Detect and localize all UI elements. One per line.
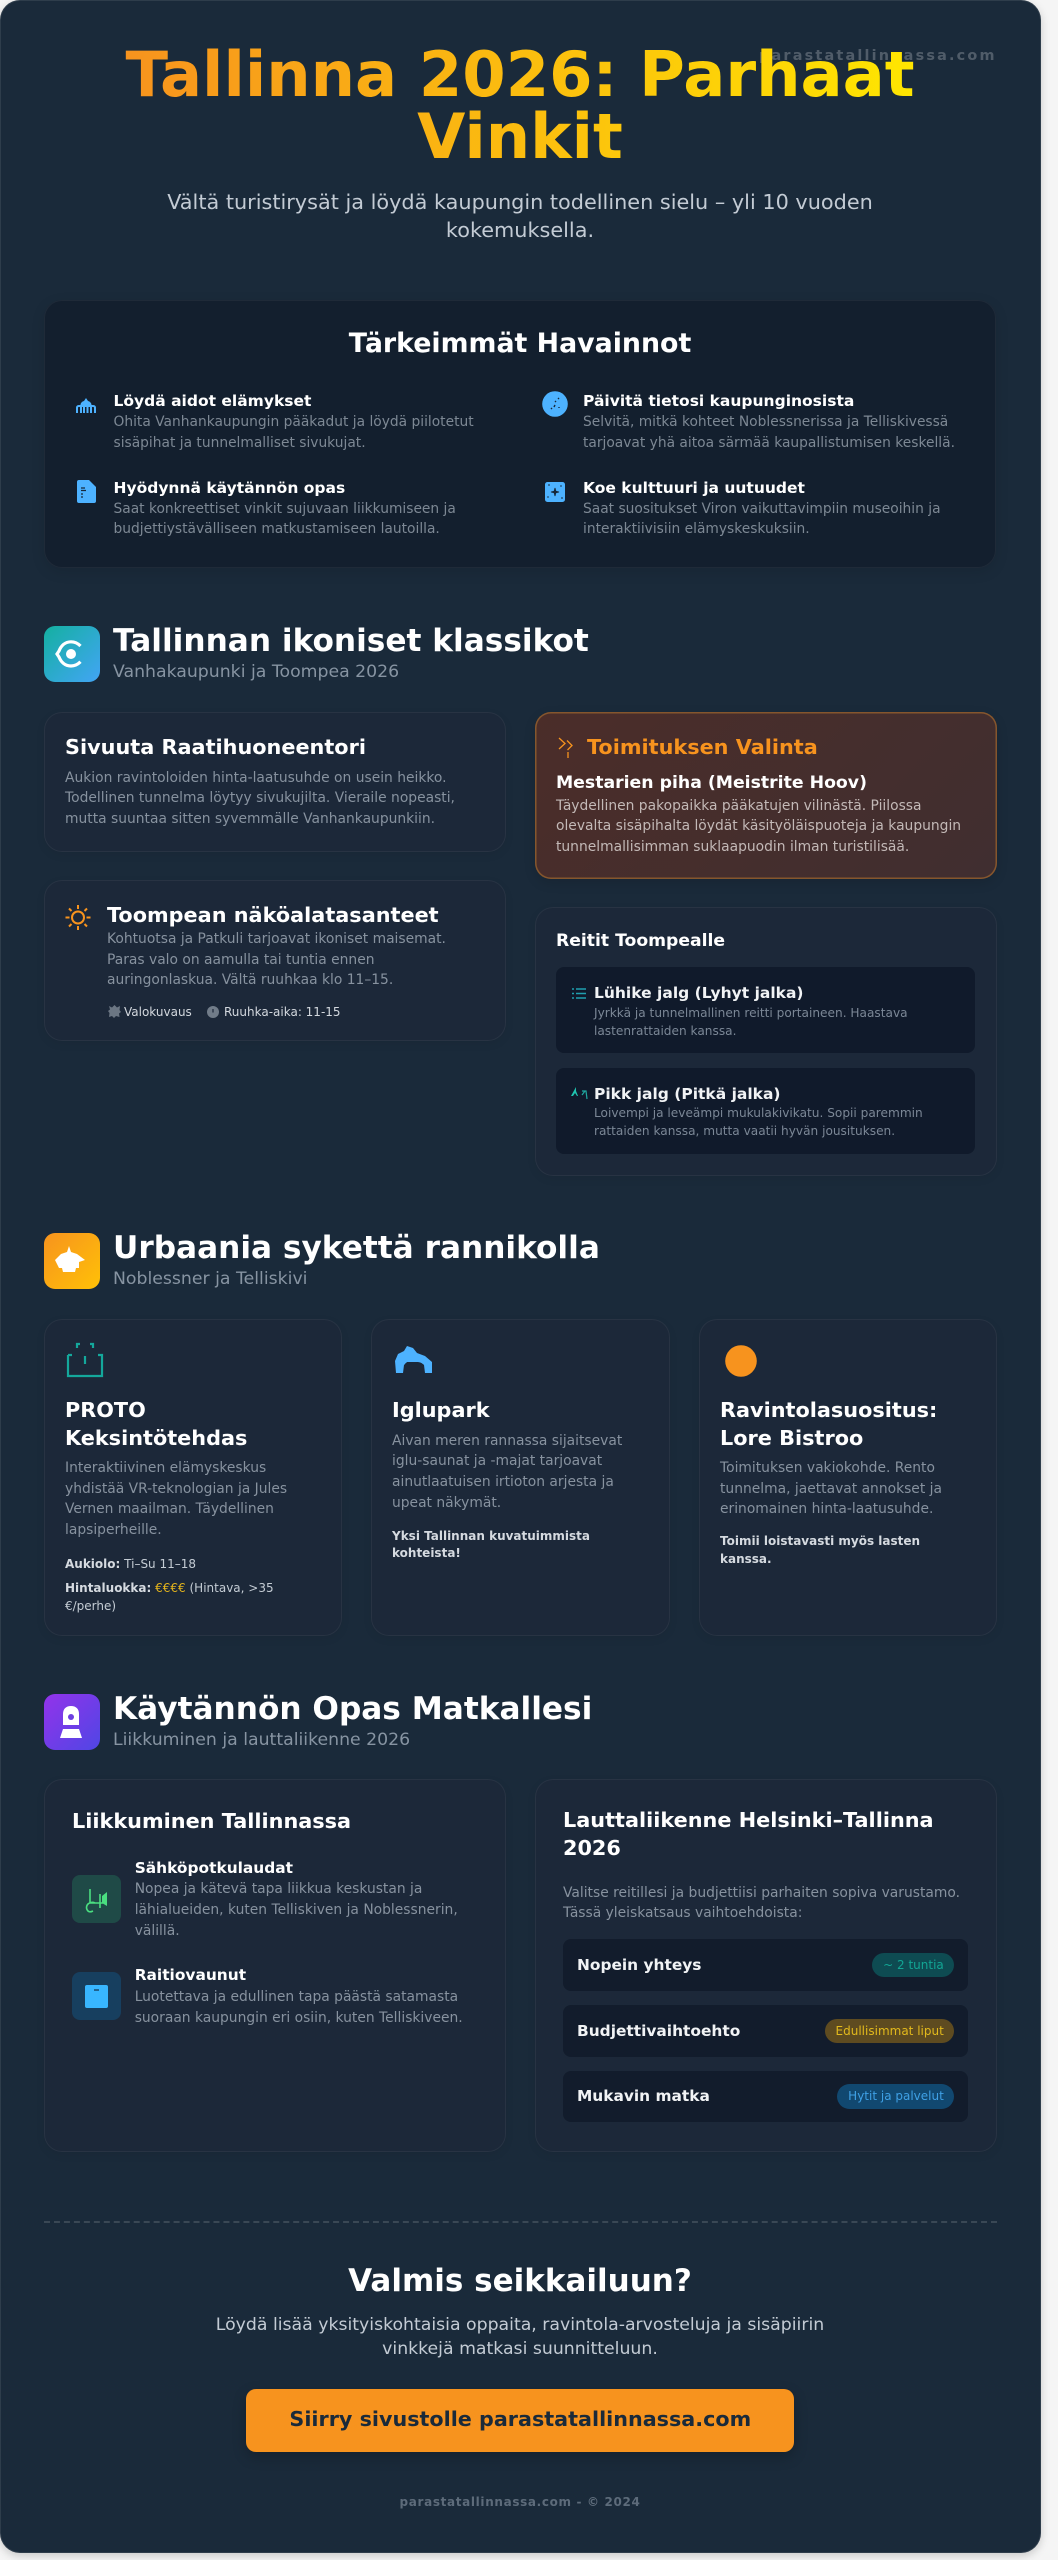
section header: urban pulse — [44, 1230, 600, 1289]
card note: kohteista! — [392, 1546, 461, 1560]
transport text — [135, 1879, 458, 1942]
panel text: Valitse reitillesi ja budjettiisi parhaiten sopiva varustamo. — [563, 1885, 960, 1901]
recommendation text: olevalta sisäpihalta löydät käsityöläispuoteja ja kaupungin — [556, 818, 961, 834]
footer: parastatallinnassa.com - © 2024 — [400, 2495, 640, 2509]
finding text — [114, 414, 474, 451]
transport: trams — [72, 1965, 492, 2035]
price range — [65, 1581, 274, 1613]
finding title: Löydä aidot elämykset — [114, 392, 311, 410]
icon: list — [572, 988, 586, 999]
card note: kanssa. — [720, 1552, 772, 1566]
recommended place name: Mestarien piha (Meistrite Hoov) — [556, 773, 867, 793]
finding: authentic experiences — [76, 392, 474, 451]
card text: Todellinen tunnelma löytyy sivukujilta. Vieraile nopeasti, — [65, 790, 455, 806]
card: PROTO — [44, 1319, 342, 1636]
title: Vinkit — [417, 100, 623, 173]
section subtitle: Vanhakaupunki ja Toompea 2026 — [113, 662, 399, 682]
transport text: välillä. — [135, 1923, 180, 1939]
transport text: Nopea ja kätevä tapa liikkua keskustan ja — [135, 1881, 422, 1897]
finding text: Selvitä, mitkä kohteet Noblessnerissa ja Telliskivessä — [583, 414, 948, 430]
badge: duration: ~ 2 tuntia — [883, 1958, 944, 1972]
panel title: Liikkuminen Tallinnassa — [72, 1809, 351, 1833]
tag label: Ruuhka-aika: 11-15 — [224, 1004, 341, 1018]
option label: Budjettivaihtoehto — [577, 2022, 740, 2040]
finding text: budjettiystävälliseen matkustamiseen lautoilla. — [114, 521, 440, 537]
finding text: interaktiivisiin elämyskeskuksiin. — [583, 521, 810, 537]
panel text: Tässä yleiskatsaus vaihtoehdoista: — [563, 1905, 802, 1921]
route text: rattaiden kanssa, mutta vaatii hyvän jousituksen. — [594, 1124, 895, 1138]
tag: photography — [108, 1004, 192, 1018]
ferry option: comfort — [563, 2071, 968, 2122]
transport: e-scooters — [72, 1858, 492, 1943]
transport text: Luotettava ja edullinen tapa päästä satamasta — [135, 1989, 458, 2005]
card text: Aukion ravintoloiden hinta-laatusuhde on usein heikko. — [65, 770, 447, 786]
transport text: lähialueiden, kuten Telliskiven ja Noblessnerin, — [135, 1902, 458, 1918]
card text: erinomainen hinta-laatusuhde. — [720, 1501, 933, 1517]
recommendation text — [556, 798, 961, 855]
icon: factory outline — [66, 1342, 104, 1378]
card text: upeat näkymät. — [392, 1495, 501, 1511]
subtitle — [167, 190, 873, 242]
panel title: 2026 — [563, 1836, 621, 1860]
icon: sparkle square — [545, 482, 565, 502]
card text: Aivan meren rannassa sijaitsevat — [392, 1433, 622, 1449]
card text: tunnelma, jaettavat annokset ja — [720, 1481, 942, 1497]
finding text — [583, 414, 955, 451]
card text: Toimituksen vakiokohde. Rento — [720, 1460, 935, 1476]
finding text: tarjoavat yhä aitoa särmää kaupallistumisen keskellä. — [583, 435, 955, 451]
transport text: suoraan kaupungin eri osiin, kuten Telliskiveen. — [135, 2010, 463, 2026]
price range: Hintaluokka: €€€€ (Hintava, >35 — [65, 1581, 274, 1595]
section title: Urbaania sykettä rannikolla — [113, 1230, 600, 1266]
panel text — [563, 1883, 960, 1924]
card text: iglu-saunat ja -majat tarjoavat — [392, 1453, 602, 1469]
card title — [720, 1398, 937, 1450]
CTA heading: Valmis seikkailuun? — [348, 2263, 692, 2299]
card: Toompea viewing platforms — [44, 880, 506, 1041]
card text: Interaktiivinen elämyskeskus — [65, 1460, 266, 1476]
card text: mutta suuntaa sitten syvemmälle Vanhankaupunkiin. — [65, 811, 435, 827]
title — [122, 44, 918, 168]
tag: rush hour — [207, 1004, 341, 1018]
route name: Pikk jalg (Pitkä jalka) — [594, 1085, 781, 1103]
transport text — [135, 1987, 463, 2029]
icon: person badge — [44, 1694, 100, 1750]
CTA text: vinkkejä matkasi suunnitteluun. — [382, 2339, 658, 2359]
icon: chevrons — [558, 738, 573, 758]
icon: house badge — [44, 1233, 100, 1289]
icon: igloo — [395, 1346, 432, 1373]
transport name: Raitiovaunut — [135, 1966, 246, 1984]
card: Lore Bistroo — [699, 1319, 997, 1636]
finding text — [114, 500, 456, 537]
card text — [107, 931, 446, 988]
card title: Ravintolasuositus: — [720, 1398, 937, 1422]
finding text — [583, 500, 941, 537]
finding: city districts — [542, 391, 955, 451]
icon: orange circle — [725, 1345, 757, 1377]
panel: getting around Tallinn — [44, 1779, 506, 2152]
section title: Käytännön Opas Matkallesi — [113, 1690, 592, 1726]
badge: price: Edullisimmat liput — [836, 2024, 944, 2038]
icon: camera — [108, 1005, 121, 1018]
panel: key findings — [44, 300, 996, 568]
watermark: parastatallinnassa.com — [759, 48, 997, 64]
card title: Keksintötehdas — [65, 1426, 247, 1450]
card: skip town hall square — [44, 712, 506, 852]
finding title: Koe kulttuuri ja uutuudet — [583, 478, 805, 496]
icon: tram — [72, 1972, 120, 2020]
route name: Lühike jalg (Lyhyt jalka) — [594, 984, 804, 1002]
section subtitle: Liikkuminen ja lauttaliikenne 2026 — [113, 1730, 410, 1750]
CTA button: Siirry sivustolle parastatallinnassa.com — [289, 2407, 751, 2431]
card title: Reitit Toompealle — [556, 931, 725, 951]
route text — [594, 1106, 923, 1138]
ferry option: fastest — [563, 1939, 968, 1991]
card title: PROTO — [65, 1398, 146, 1422]
finding: practical guide — [77, 478, 456, 537]
badge: price — [825, 2019, 954, 2043]
card note — [720, 1534, 920, 1566]
card text — [64, 770, 455, 827]
card text: Paras valo on aamulla tai tuntia ennen — [107, 952, 374, 968]
transport name: Sähköpotkulaudat — [135, 1859, 293, 1877]
route text: Loivempi ja leveämpi mukulakivikatu. Sopii paremmin — [594, 1106, 923, 1120]
card title: Toompean näköalatasanteet — [107, 903, 439, 927]
tag label: Valokuvaus — [124, 1004, 192, 1018]
price range: €/perhe) — [65, 1599, 116, 1613]
title: Tallinna 2026: Parhaat — [125, 38, 915, 111]
icon: sun — [66, 905, 90, 930]
finding text: sisäpihat ja tunnelmalliset sivukujat. — [114, 435, 366, 451]
panel: ferry traffic — [535, 1779, 997, 2152]
card: Iglupark — [370, 1319, 670, 1636]
card: editor's choice — [535, 712, 997, 879]
heading: key findings: Tärkeimmät Havainnot — [349, 328, 691, 359]
section title: Tallinnan ikoniset klassikot — [113, 623, 589, 659]
card title — [65, 1398, 247, 1450]
panel title: Lauttaliikenne Helsinki–Tallinna — [563, 1808, 934, 1832]
card title: Lore Bistroo — [720, 1426, 863, 1450]
option label: Nopein yhteys — [577, 1956, 701, 1974]
icon: scooter — [72, 1875, 120, 1923]
panel title — [563, 1806, 934, 1862]
section header: practical guide — [44, 1694, 644, 1750]
icon: eye badge — [44, 626, 100, 682]
icon: dotted globe — [542, 391, 568, 417]
route: long leg — [556, 1068, 975, 1154]
route text: Jyrkkä ja tunnelmallinen reitti portaineen. Haastava — [594, 1006, 908, 1020]
badge: services: Hytit ja palvelut — [848, 2089, 944, 2103]
card text: lapsiperheille. — [65, 1522, 162, 1538]
finding title: Päivitä tietosi kaupunginosista — [583, 392, 854, 410]
recommendation text: Täydellinen pakopaikka pääkatujen vilinästä. Piilossa — [556, 798, 922, 814]
card text: Kohtuotsa ja Patkuli tarjoavat ikoniset maisemat. — [107, 931, 446, 947]
card note — [392, 1528, 590, 1560]
card text: yhdistää VR-teknologian ja Jules — [65, 1481, 287, 1497]
CTA button — [246, 2389, 794, 2452]
badge: services — [837, 2084, 954, 2109]
editor's choice heading: Toimituksen Valinta — [587, 735, 818, 759]
CTA text: Löydä lisää yksityiskohtaisia oppaita, ravintola-arvosteluja ja sisäpiirin — [216, 2314, 824, 2334]
finding title: Hyödynnä käytännön opas — [114, 478, 345, 496]
card title: Sivuuta Raatihuoneentori — [65, 735, 366, 759]
recommendation text: tunnelmallisimman suklaapuodin ilman turistilisää. — [556, 839, 909, 855]
icon: dome — [76, 398, 96, 413]
route text — [593, 1006, 908, 1038]
card text: ainutlaatuisen irtioton arjesta ja — [392, 1474, 614, 1490]
card text — [65, 1460, 287, 1538]
CTA text — [0, 2312, 1040, 2361]
finding text: Saat suositukset Viron vaikuttavimpiin museoihin ja — [583, 500, 941, 516]
route: short leg — [556, 967, 975, 1053]
subtitle: Vältä turistirysät ja löydä kaupungin todellinen sielu – yli 10 vuoden — [167, 190, 873, 214]
section subtitle: Noblessner ja Telliskivi — [113, 1269, 307, 1289]
card note: Toimii loistavasti myös lasten — [720, 1534, 920, 1548]
finding text: Ohita Vanhankaupungin pääkadut ja löydä piilotetut — [114, 414, 474, 430]
opening hours: Aukiolo: Ti–Su 11–18 — [65, 1557, 196, 1571]
card note: Yksi Tallinnan kuvatuimmista — [392, 1528, 590, 1542]
icon: clock — [207, 1006, 219, 1018]
call to action — [0, 2255, 1040, 2525]
badge: duration — [872, 1953, 954, 1977]
card: routes to Toompea — [535, 907, 997, 1176]
section header: iconic classics — [44, 623, 589, 682]
finding text: Saat konkreettiset vinkit sujuvaan liikkumiseen ja — [114, 500, 456, 516]
route text: lastenrattaiden kanssa. — [594, 1024, 736, 1038]
icon: document — [77, 480, 96, 503]
card text — [720, 1460, 942, 1517]
card text: auringonlaskua. Vältä ruuhkaa klo 11–15. — [107, 972, 393, 988]
card text: Vernen maailman. Täydellinen — [65, 1501, 274, 1517]
ferry option: budget — [563, 2005, 968, 2057]
card title: Iglupark — [392, 1398, 490, 1422]
icon: walkers — [571, 1087, 588, 1100]
card text — [392, 1433, 622, 1511]
option label: Mukavin matka — [577, 2087, 710, 2105]
subtitle: kokemuksella. — [446, 218, 594, 242]
finding: culture and news — [545, 478, 941, 537]
